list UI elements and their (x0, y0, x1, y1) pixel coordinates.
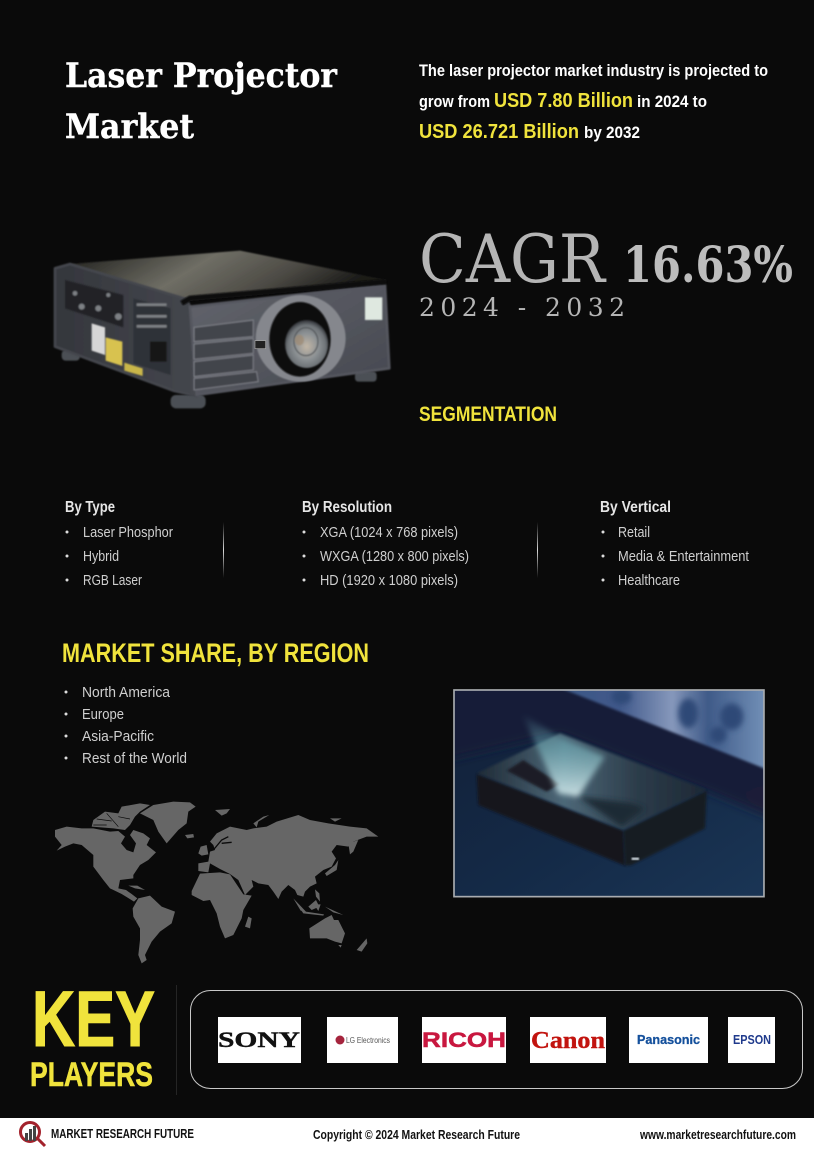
lens slot (507, 760, 560, 792)
key players heading: KEY (32, 974, 155, 1063)
market summary text: grow from (419, 92, 490, 111)
market summary text: The laser projector market industry is projected to (419, 61, 768, 80)
segment: by type: Laser Phosphor (83, 525, 173, 541)
light beam (522, 713, 605, 797)
CAGR: 2024 - 2032 (419, 293, 625, 322)
wall (458, 699, 763, 816)
market summary text: by 2032 (584, 123, 640, 142)
front label (365, 297, 382, 320)
region list: Europe (82, 707, 124, 723)
segment: by vertical: By Vertical (600, 499, 671, 516)
front vents (194, 320, 258, 390)
segment: by resolution: HD (1920 x 1080 pixels) (320, 573, 458, 589)
heading: segmentation: SEGMENTATION (419, 403, 557, 426)
lens housing (269, 302, 331, 377)
map: Americas and Greenland (55, 802, 208, 963)
segment: by vertical (600, 499, 749, 589)
projector feet (62, 350, 377, 408)
segment: by type (65, 499, 173, 589)
logo: Canon (530, 1017, 606, 1063)
CAGR: CAGR (419, 221, 607, 298)
dark lid reflection (578, 797, 645, 827)
segment: by vertical: Media & Entertainment (618, 549, 749, 565)
lens ring (256, 295, 346, 382)
segment: by resolution: By Resolution (302, 499, 392, 516)
segment: by vertical: Retail (618, 525, 650, 541)
projector top (70, 252, 385, 299)
region list: North America (82, 685, 171, 701)
segment: by type: By Type (65, 499, 115, 516)
projector right side (623, 791, 707, 866)
key players panel (190, 990, 802, 1088)
segment: by vertical: Healthcare (618, 573, 680, 589)
logo: Sony: SONY (218, 1027, 300, 1052)
title: Market (65, 107, 194, 147)
projector front (190, 285, 389, 395)
footer (0, 1118, 814, 1150)
image: laser projector (55, 252, 389, 408)
logo: Sony (218, 1017, 301, 1063)
footer logo icon (20, 1122, 45, 1146)
projector left side (55, 264, 197, 396)
heading: market share by region: MARKET SHARE, BY REGION (62, 638, 369, 668)
logo: Panasonic (629, 1017, 708, 1063)
segment: by resolution: WXGA (1280 x 800 pixels) (320, 549, 469, 565)
market summary text: in 2024 to (637, 92, 707, 111)
screen shapes (612, 689, 743, 743)
photo frame (454, 690, 764, 897)
market summary text: USD 26.721 Billion (419, 121, 579, 143)
lens glass (285, 320, 328, 368)
market summary text (419, 61, 768, 143)
CAGR (419, 221, 793, 322)
map: Baltic (213, 837, 232, 850)
logo: Panasonic: Panasonic (637, 1032, 700, 1047)
image: ultra short throw projector (453, 689, 765, 898)
logo: LG Electronics: LG Electronics (346, 1036, 390, 1045)
title (65, 56, 338, 147)
side input panels (65, 280, 171, 376)
projector black edge (182, 282, 387, 303)
key players heading (30, 974, 155, 1094)
logo: LG Electronics (327, 1017, 398, 1063)
map: Arctic channels (93, 813, 130, 827)
footer: Copyright © 2024 Market Research Future (313, 1127, 520, 1142)
region list: Rest of the World (82, 751, 187, 767)
world map (55, 802, 378, 963)
floor (454, 730, 764, 896)
map: Eurasia, Africa and Oceania (192, 809, 378, 952)
key players heading: PLAYERS (30, 1056, 153, 1094)
logo: Epson (728, 1017, 775, 1063)
logo: Epson: EPSON (733, 1032, 771, 1047)
region list: Asia-Pacific (82, 729, 154, 745)
logo: Ricoh (422, 1017, 506, 1063)
region list (64, 685, 187, 767)
footer: MARKET RESEARCH FUTURE (51, 1126, 194, 1141)
screen (557, 687, 767, 769)
segment: by type: Hybrid (83, 549, 119, 565)
market summary text: USD 7.80 Billion (494, 90, 633, 112)
logo: Canon: Canon (531, 1028, 605, 1054)
title: Laser Projector (65, 56, 338, 96)
segment: by resolution (302, 499, 469, 589)
logo: Ricoh: RICOH (422, 1029, 506, 1052)
projector front side (477, 774, 625, 866)
segment: by type: RGB Laser (83, 573, 142, 589)
segment: by resolution: XGA (1024 x 768 pixels) (320, 525, 458, 541)
projector lid (477, 733, 707, 830)
